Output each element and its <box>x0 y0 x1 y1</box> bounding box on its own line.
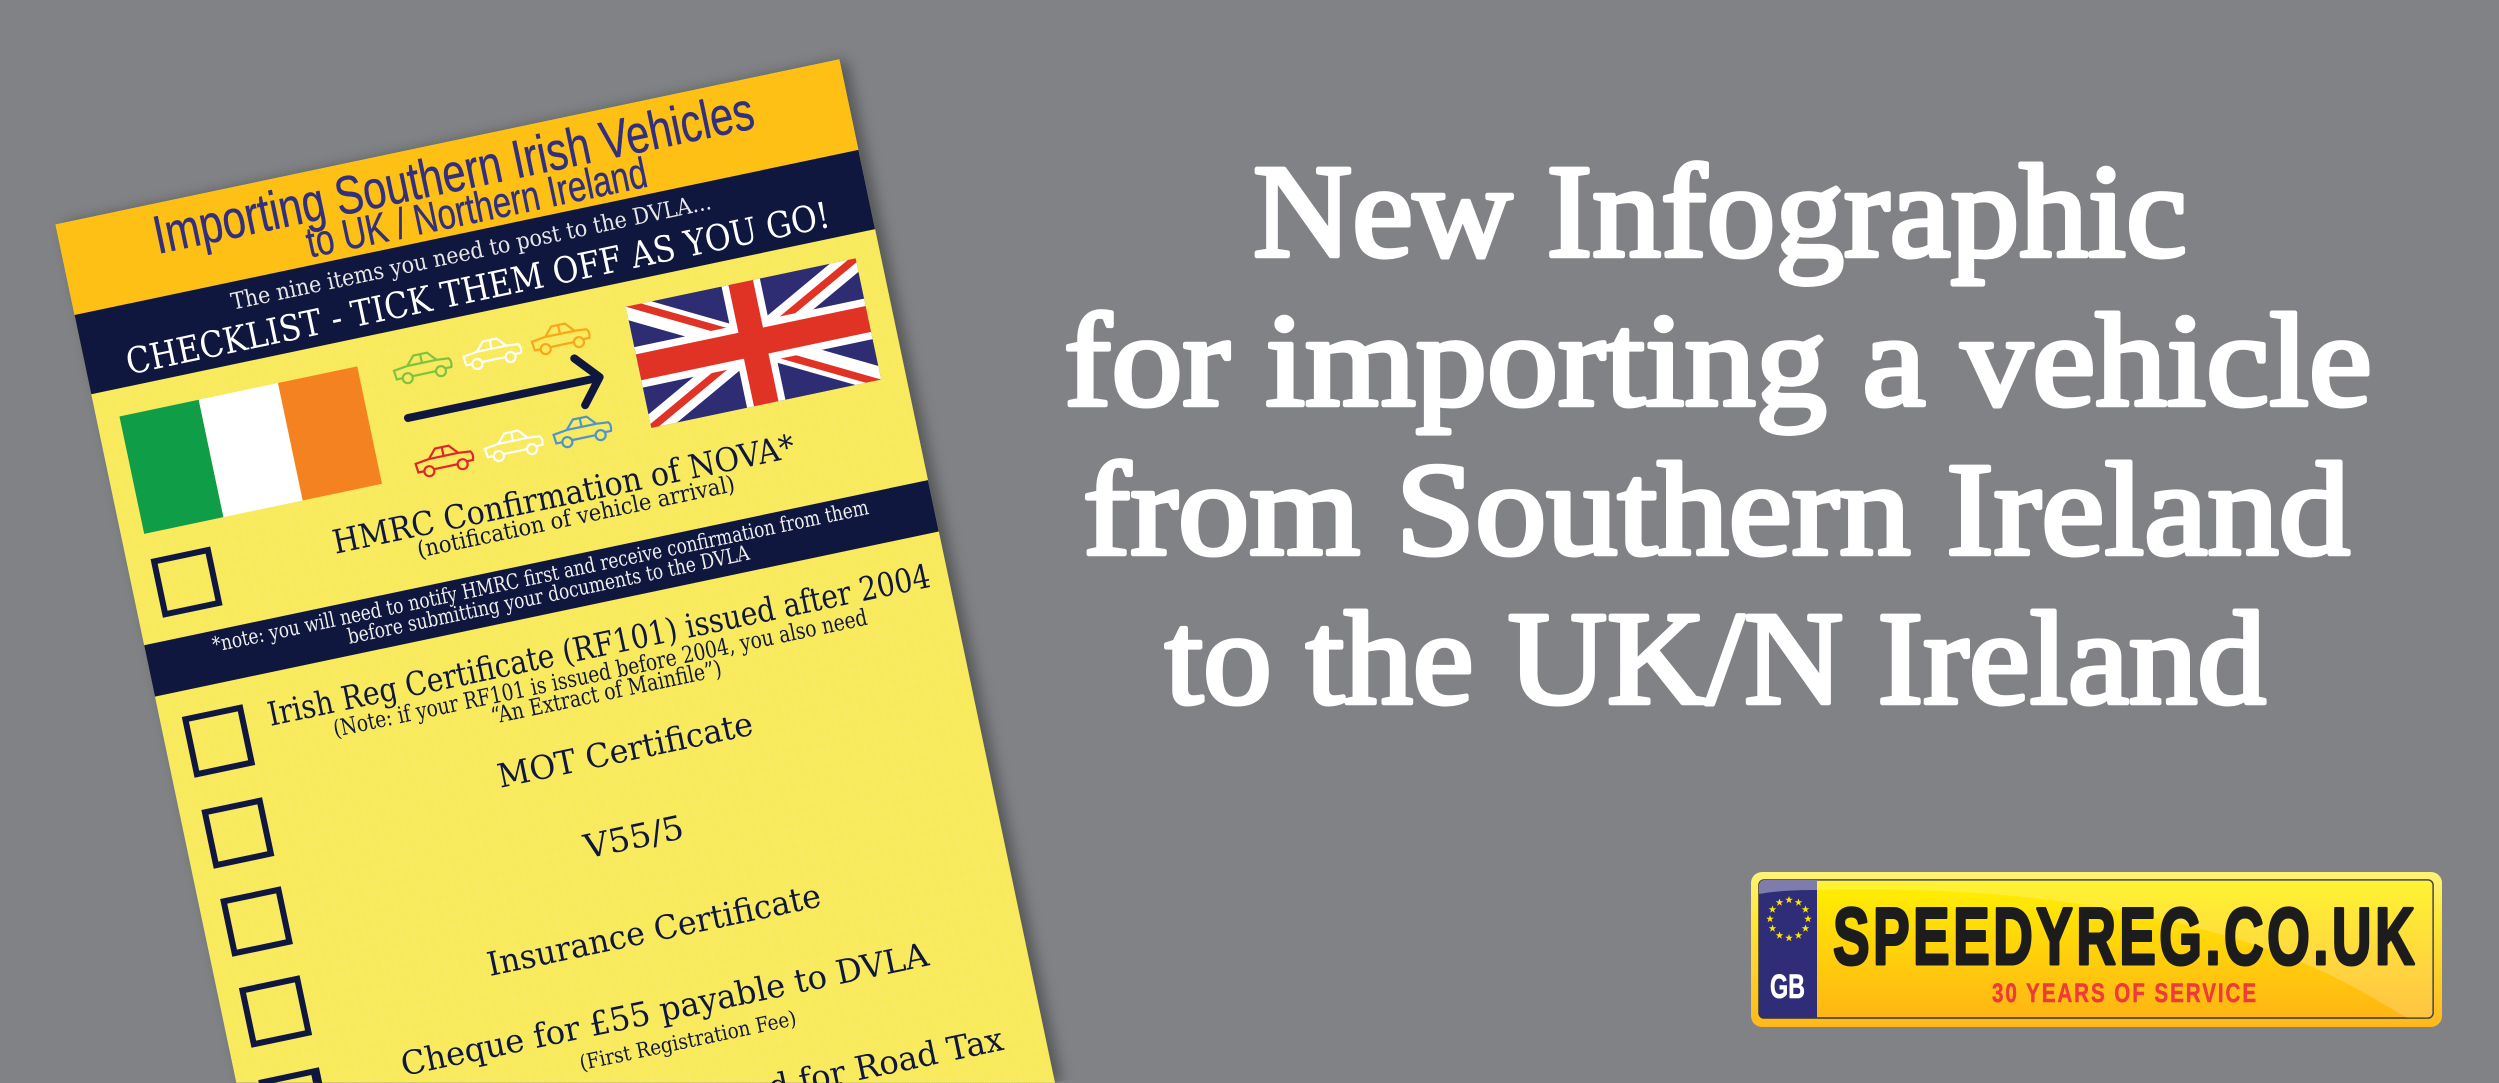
headline: to the UK/N Ireland <box>1165 584 2266 732</box>
headline: from Southern Ireland <box>1083 435 2350 583</box>
icon: Irish flag <box>119 366 382 534</box>
logo: number plate: 30 YEARS OF SERVICE <box>1992 978 2258 1008</box>
checklist item: MOT certificate: MOT Certificate <box>494 704 756 796</box>
note band <box>144 480 939 697</box>
checklist item: V55/5: V55/5 <box>579 807 687 867</box>
checklist item: cheque: (First Registration Fee) <box>577 1006 798 1075</box>
checklist item: HMRC confirmation: (notification of vehicle arrival) <box>415 471 737 564</box>
EU band <box>1759 880 1817 1018</box>
icon: orange car <box>530 322 590 356</box>
checklist item: Irish reg certificate: “An Extract of Mainfile”) <box>489 656 724 730</box>
checklist item: V55/5 <box>224 805 690 953</box>
heading band: to UK / Northern Ireland <box>302 149 651 268</box>
icon: Union flag <box>626 258 882 428</box>
glare <box>1817 880 2433 1018</box>
icon: white car lower <box>484 429 544 462</box>
icon: green car <box>392 352 453 384</box>
heading band: Importing Southern Irish Vehicles <box>148 81 759 266</box>
icon: red car <box>414 444 474 478</box>
checklist banner: CHECKLIST - TICK THEM OFF AS YOU GO! <box>122 195 833 383</box>
headline <box>1064 137 2372 732</box>
headline: New Infographic <box>1253 137 2187 285</box>
checklist item: Irish reg certificate <box>182 564 930 778</box>
poster sheet <box>56 59 1055 1083</box>
heading band <box>56 59 859 317</box>
checklist item: HMRC confirmation <box>154 426 802 617</box>
checklist item: MOT certificate <box>205 698 758 865</box>
note band: before submitting your documents to the DVLA <box>345 541 752 649</box>
icon: blue car <box>552 416 612 448</box>
checklist item: insurance certificate <box>242 870 826 1044</box>
icon: white car <box>462 337 522 370</box>
logo: number plate <box>1751 872 2442 1030</box>
checklist item: Irish reg certificate: Irish Reg Certificate (RF101) issued after 2004 <box>264 556 934 734</box>
checklist item: HMRC confirmation: HMRC Confirmation of NOVA* <box>329 426 798 562</box>
EU band: GB <box>1770 968 1805 1006</box>
checkbox cropped by page edge <box>258 1067 322 1083</box>
panel: rotated checklist poster <box>56 59 1055 1083</box>
checklist item: insurance certificate: Insurance Certificate <box>483 876 824 984</box>
checklist item: cheque: Cheque for £55 payable to DVLA <box>397 935 933 1083</box>
checklist banner: The nine items you need to post to the DVLA... <box>229 189 714 316</box>
headline: for importing a vehicle <box>1064 286 2372 434</box>
note band: *note: you will need to notify HMRC first and receive confirmation from them <box>210 495 871 657</box>
checklist item: Irish reg certificate: (Note: if your RF101 is issued before 2004, you also need <box>331 605 870 743</box>
arrow: Ireland to UK <box>404 354 604 422</box>
